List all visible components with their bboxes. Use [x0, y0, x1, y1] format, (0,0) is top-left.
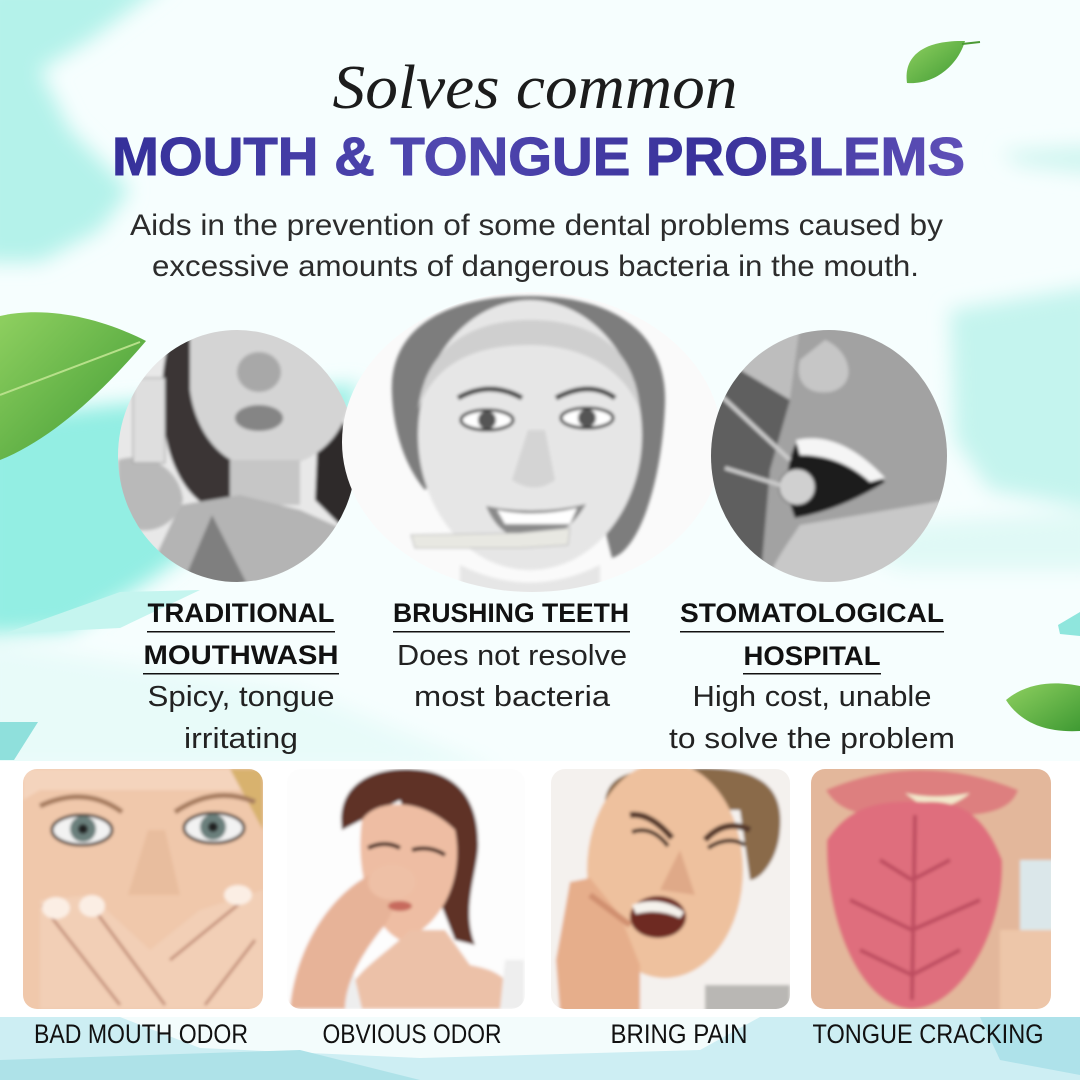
leaf: top right: [907, 41, 980, 83]
heading: MOUTH & TONGUE PROBLEMS: [112, 127, 965, 187]
captions row: BRING PAIN: [610, 1019, 748, 1049]
title: Solves common: [332, 54, 738, 122]
bottom section white band: [0, 761, 1080, 1017]
photo: brushing teeth circle: [342, 293, 668, 592]
label: stomatological hospital: [669, 598, 955, 755]
photo: bad mouth odor: [20, 765, 266, 1013]
label: brushing teeth: [393, 598, 630, 713]
intro text: [130, 209, 943, 283]
label: stomatological hospital: High cost, unable: [692, 681, 932, 713]
intro text: Aids in the prevention of some dental problems caused by: [130, 209, 943, 242]
captions row: OBVIOUS ODOR: [322, 1019, 502, 1049]
captions row: [34, 1019, 1044, 1049]
photo: tongue cracking: [808, 765, 1054, 1013]
bottom caption strip: [0, 1017, 1080, 1080]
intro text: excessive amounts of dangerous bacteria in the mouth.: [152, 250, 919, 283]
leaf: left large: [0, 312, 146, 460]
photo: obvious odor: [284, 765, 528, 1013]
label: stomatological hospital: STOMATOLOGICAL: [680, 598, 944, 628]
photo: mouthwash circle: [118, 330, 352, 582]
label: traditional mouthwash: TRADITIONAL: [148, 598, 334, 628]
label: brushing teeth: BRUSHING TEETH: [393, 598, 629, 628]
captions row: TONGUE CRACKING: [812, 1019, 1044, 1049]
label: brushing teeth: most bacteria: [414, 681, 611, 713]
label: stomatological hospital: HOSPITAL: [744, 641, 880, 671]
label: brushing teeth: Does not resolve: [397, 640, 627, 672]
label: stomatological hospital: to solve the problem: [669, 723, 955, 755]
photo: dental hospital circle: [711, 330, 947, 582]
label: traditional mouthwash: MOUTHWASH: [144, 640, 338, 670]
captions row: BAD MOUTH ODOR: [34, 1019, 248, 1049]
label: traditional mouthwash: [143, 598, 339, 755]
leaf: right small: [1006, 683, 1080, 731]
photo: bring pain: [548, 762, 793, 1013]
label: traditional mouthwash: Spicy, tongue: [148, 681, 334, 713]
label: traditional mouthwash: irritating: [184, 723, 298, 755]
